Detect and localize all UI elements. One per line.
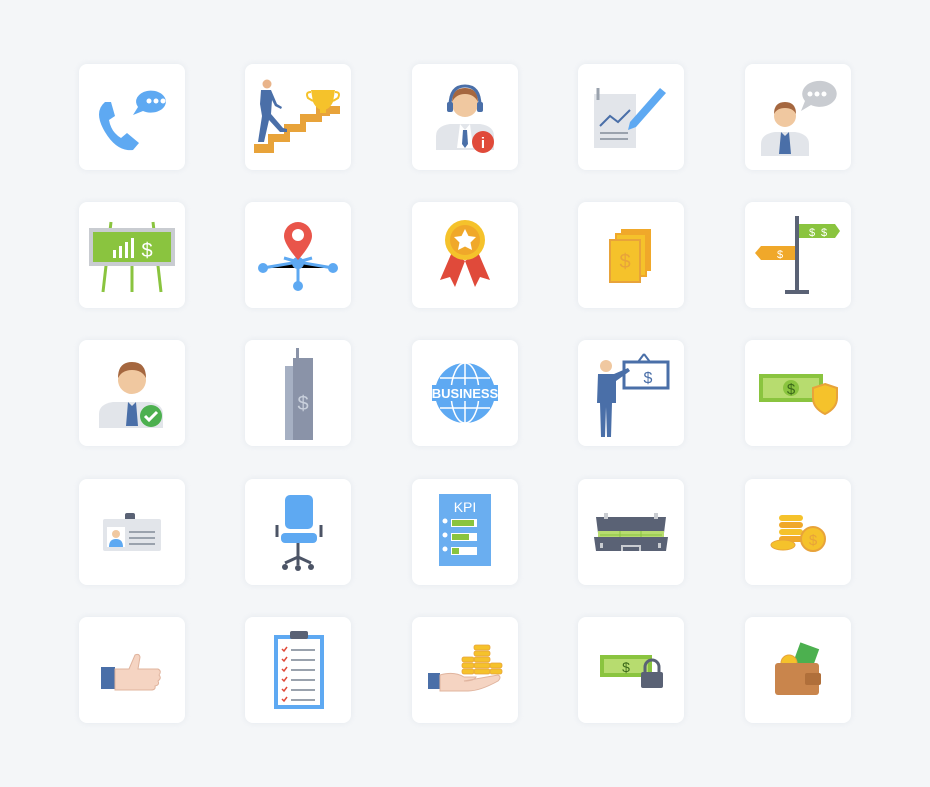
tile: skyscraper [245,340,351,446]
tile: person check [79,340,185,446]
tile: signpost: $ [821,227,827,239]
tile: presenter board [578,340,684,446]
tile: money case [578,479,684,585]
tile: money shield: $ [787,381,796,398]
tile: easel chart [79,202,185,308]
tile: skyscraper: $ [297,393,309,415]
tile: award badge [412,202,518,308]
tile: support operator [412,64,518,170]
tile: ID card [79,479,185,585]
tile: support operator: i [481,135,485,152]
tile: signpost: $ [777,249,783,261]
tile: person speech [745,64,851,170]
tile: money shield [745,340,851,446]
tile: phone call [79,64,185,170]
tile: location network [245,202,351,308]
tile: money lock: $ [622,659,630,675]
tile: coins: $ [809,532,818,549]
tile: office chair [245,479,351,585]
tile: thumbs up [79,617,185,723]
tile: wallet [745,617,851,723]
tile: presenter board: $ [644,370,653,387]
tile: easel chart: $ [141,240,153,262]
tile: report pen [578,64,684,170]
tile: clipboard [245,617,351,723]
tile: signpost [745,202,851,308]
tile: cash stack [578,202,684,308]
tile: coins [745,479,851,585]
tile: KPI [412,479,518,585]
tile: stairs trophy [245,64,351,170]
tile: business globe: BUSINESS [432,386,499,401]
tile: cash stack: $ [619,251,631,273]
tile: money lock [578,617,684,723]
tile: hand coins [412,617,518,723]
tile: signpost: $ [809,227,815,239]
tile: business globe [412,340,518,446]
tile: KPI: KPI [454,499,476,515]
